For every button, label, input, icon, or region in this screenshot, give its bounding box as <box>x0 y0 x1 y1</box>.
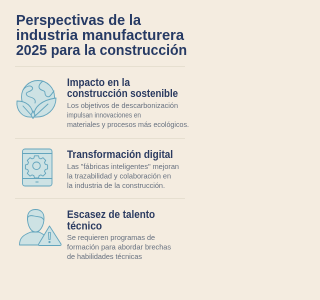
heading: impacto <box>67 77 178 100</box>
text: transformación description: la trazabilidad y colaboración en <box>67 172 171 180</box>
panel: digital transformation <box>22 149 179 190</box>
icon: tablet with gear <box>22 149 52 186</box>
text: escasez description <box>67 233 171 261</box>
icon: globe with leaves <box>17 80 56 118</box>
text: escasez description: de habilidades técnicas <box>67 252 142 261</box>
text: impacto description <box>67 101 189 129</box>
heading: escasez: técnico <box>67 220 102 232</box>
heading: impacto: construcción sostenible <box>67 88 178 100</box>
icon: worker with warning <box>20 210 61 246</box>
text: transformación description <box>67 162 179 190</box>
heading: escasez <box>67 209 155 232</box>
panel: sustainable construction <box>17 77 189 129</box>
text: impacto description: materiales y procesos más ecológicos. <box>67 120 189 129</box>
title: 2025 para la construcción <box>16 43 187 59</box>
heading: escasez: Escasez de talento <box>67 209 155 221</box>
text: impacto description: impulsan innovaciones en <box>67 110 141 120</box>
title: Perspectivas de la <box>16 13 142 29</box>
title <box>16 13 187 59</box>
title: industria manufacturera <box>16 28 185 44</box>
text: impacto description: Los objetivos de descarbonización <box>67 101 178 110</box>
heading: impacto: Impacto en la <box>67 77 130 89</box>
text: escasez description: formación para abordar brechas <box>67 242 171 252</box>
heading: transformación digital: Transformación digital <box>67 149 173 161</box>
panel: talent shortage <box>20 209 171 261</box>
text: transformación description: Las "fábricas inteligentes" mejoran <box>67 162 179 171</box>
text: escasez description: Se requieren programas de <box>67 233 155 242</box>
text: transformación description: la industria de la construcción. <box>67 181 165 190</box>
